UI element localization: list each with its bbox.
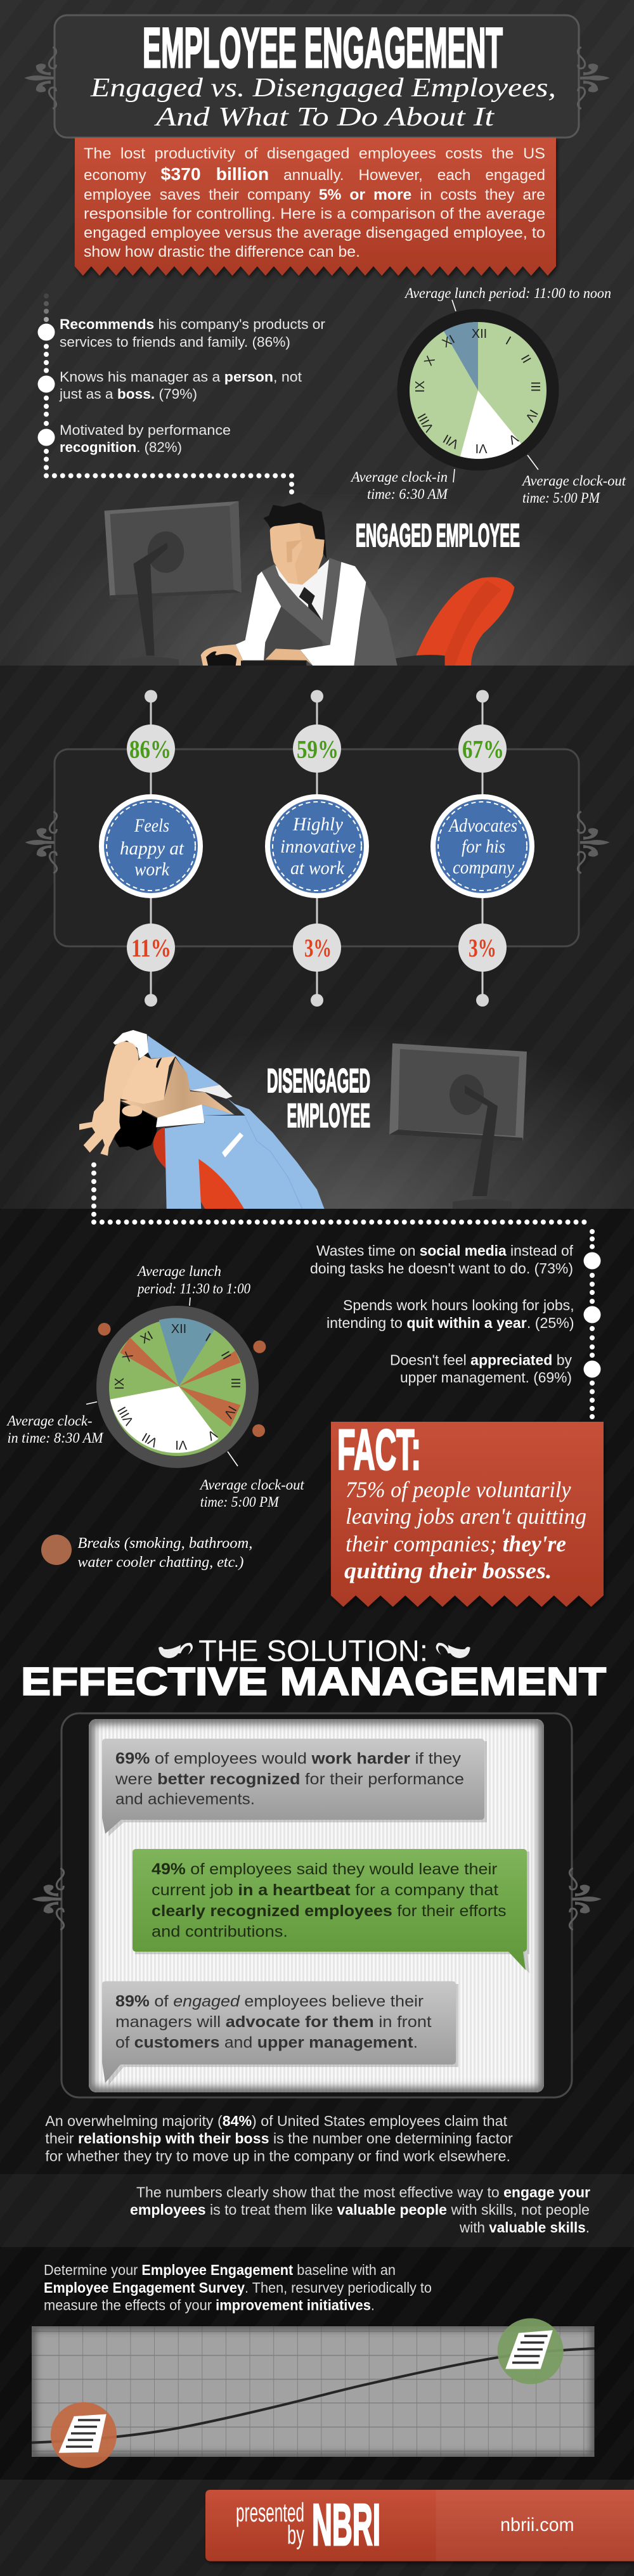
speech bubble: recognition: 69% of employees would work harder if they bbox=[115, 1750, 462, 1768]
numerals: III bbox=[528, 382, 542, 392]
light card bbox=[89, 1719, 544, 2092]
numerals: VI bbox=[175, 1438, 187, 1452]
numerals: V bbox=[205, 1427, 219, 1443]
clock face bbox=[109, 1319, 246, 1456]
numerals bbox=[113, 1322, 242, 1452]
text block: determine baseline bbox=[44, 2262, 432, 2314]
dotted connector bbox=[38, 293, 294, 494]
numerals: VII bbox=[139, 1429, 160, 1450]
panel: title header bbox=[24, 15, 610, 138]
label: clock-out: Average clock-out bbox=[521, 473, 626, 489]
by: by bbox=[287, 2520, 304, 2550]
legend text: Breaks (smoking, bathroom, bbox=[77, 1535, 252, 1552]
marker: baseline survey bbox=[51, 2402, 117, 2468]
intro text: employee saves their company 5% or more in costs they are bbox=[84, 186, 545, 203]
numerals: I bbox=[203, 1330, 213, 1344]
subtitle line 1: Engaged vs. Disengaged Employees, bbox=[90, 74, 556, 103]
text: knows manager: Knows his manager as a person, not bbox=[60, 369, 302, 385]
label: clock-out time: time: 5:00 PM bbox=[522, 490, 601, 506]
text block: overwhelming majority bbox=[45, 2113, 513, 2165]
illustration: disengaged employee bbox=[79, 1030, 527, 1209]
speech bubble: recognition: and achievements. bbox=[115, 1791, 255, 1808]
label: clock-out time: time: 5:00 PM bbox=[200, 1494, 280, 1510]
column: advocates: company bbox=[453, 857, 515, 878]
column: advocates bbox=[430, 690, 534, 1007]
numerals: X bbox=[422, 354, 438, 368]
numerals: II bbox=[218, 1349, 233, 1362]
column: innovative: at work bbox=[290, 858, 345, 879]
fact text: 75% of people voluntarily bbox=[346, 1477, 571, 1502]
numerals: XII bbox=[472, 327, 487, 341]
illustration: engaged employee at desk bbox=[105, 501, 520, 666]
speech bubble: advocate: managers will advocate for them in front bbox=[115, 2013, 432, 2031]
clock: disengaged employee bbox=[6, 1263, 304, 1510]
label: lunch period: period: 11:30 to 1:00 bbox=[136, 1280, 250, 1297]
legend text line 2: water cooler chatting, etc.) bbox=[77, 1554, 243, 1571]
column: happy at work: 86% bbox=[129, 735, 171, 763]
fact text line 2: leaving jobs aren't quitting bbox=[346, 1504, 586, 1529]
fact text line 3: their companies; they're bbox=[346, 1531, 566, 1556]
text block: determine baseline: Employee Engagement Survey. Then, resurvey periodically to bbox=[44, 2279, 432, 2296]
text: looking for jobs: Spends work hours looking for jobs, bbox=[343, 1297, 574, 1313]
monitor bbox=[105, 501, 242, 666]
intro text: responsible for controlling. Here is a comparison of the average bbox=[84, 205, 545, 222]
intro text bbox=[84, 145, 545, 261]
numerals: VII bbox=[441, 431, 462, 451]
fact heading: FACT: bbox=[337, 1419, 421, 1482]
text block: numbers clearly show: with valuable skills. bbox=[459, 2219, 590, 2236]
presented: presented bbox=[236, 2497, 304, 2527]
numerals: XI bbox=[440, 333, 457, 351]
numerals: VI bbox=[476, 441, 487, 455]
panel: engaged employee facts bbox=[38, 293, 325, 494]
outer frame bbox=[61, 1713, 572, 2097]
text: knows manager line 2: just as a boss. (79%) bbox=[59, 386, 197, 402]
icon: left ornament bbox=[32, 1868, 64, 1930]
red footer bar bbox=[205, 2490, 634, 2561]
speech bubble: advocate bbox=[102, 1981, 458, 2085]
numerals: IX bbox=[413, 381, 427, 392]
chair bbox=[390, 577, 514, 666]
chart area bbox=[32, 2326, 595, 2457]
white wedge bbox=[110, 1386, 218, 1453]
label: clock-in: Average clock-in bbox=[350, 469, 448, 485]
clock face bbox=[410, 322, 547, 459]
speech bubble: heartbeat: clearly recognized employees for their efforts bbox=[152, 1902, 506, 1920]
numerals: IV bbox=[221, 1403, 239, 1421]
intro text: engaged employee versus the average disengaged employee, to bbox=[84, 224, 545, 242]
title frame bbox=[55, 15, 579, 138]
column: innovative: 3% bbox=[304, 934, 332, 962]
numerals: IX bbox=[113, 1378, 127, 1389]
marker: resurvey bbox=[498, 2318, 564, 2384]
panel: introduction bbox=[75, 138, 556, 276]
speech bubble: heartbeat bbox=[133, 1849, 529, 1973]
text block: determine baseline: measure the effects of your improvement initiatives. bbox=[44, 2297, 375, 2314]
icon: left ornament bbox=[24, 47, 56, 109]
label: clock-in time: time: 6:30 AM bbox=[367, 486, 449, 502]
text block: overwhelming majority: their relationship with their boss is the number one determining factor bbox=[45, 2130, 513, 2147]
footer: presented by NBRI bbox=[205, 2490, 634, 2561]
numerals: I bbox=[503, 334, 513, 348]
text: appreciated: Doesn't feel appreciated by bbox=[390, 1351, 572, 1368]
clock ring bbox=[397, 309, 559, 470]
icon: right ornament bbox=[578, 47, 610, 109]
dotted connector bbox=[91, 1162, 601, 1419]
column: happy at work bbox=[99, 690, 203, 1007]
column: innovative: innovative bbox=[280, 836, 356, 857]
text: quit within a year: intending to quit within a year. (25%) bbox=[327, 1315, 574, 1331]
work-free wedge bbox=[460, 390, 521, 459]
intro text: The lost productivity of disengaged employees costs the US bbox=[84, 145, 545, 162]
icon: left ornament bbox=[25, 811, 57, 873]
legend: breaks bbox=[41, 1535, 252, 1571]
monitor bbox=[389, 1043, 527, 1209]
ticks bbox=[452, 300, 538, 482]
speech bubble: heartbeat: current job in a heartbeat for a company that bbox=[152, 1881, 498, 1899]
speech bubble: heartbeat: 49% of employees said they would leave their bbox=[152, 1860, 497, 1878]
url panel highlight bbox=[436, 2490, 634, 2561]
label: clock-in: Average clock- bbox=[6, 1413, 92, 1429]
column: advocates: 3% bbox=[469, 934, 496, 962]
numerals: III bbox=[228, 1378, 242, 1388]
column: advocates: 67% bbox=[462, 735, 504, 763]
numerals bbox=[413, 327, 542, 455]
speech bubble: advocate: 89% of engaged employees believe their bbox=[115, 1993, 424, 2011]
solution heading: THE SOLUTION: bbox=[198, 1634, 428, 1667]
label: clock-in time: in time: 8:30 AM bbox=[8, 1430, 104, 1446]
numerals: XII bbox=[171, 1322, 186, 1336]
lunch wedge bbox=[444, 322, 478, 390]
column: happy at work: work bbox=[134, 859, 170, 880]
text: motivated: Motivated by performance bbox=[60, 422, 231, 438]
url: nbrii.com bbox=[500, 2515, 574, 2535]
text block: numbers clearly show bbox=[130, 2184, 590, 2236]
swirl right bbox=[436, 1643, 470, 1658]
numerals: VIII bbox=[115, 1404, 137, 1427]
text block: numbers clearly show: employees is to treat them like valuable people with skills, not people bbox=[130, 2201, 590, 2218]
column: happy at work: 11% bbox=[131, 934, 171, 962]
text: social media: Wastes time on social media instead of bbox=[316, 1242, 574, 1259]
lunch wedge bbox=[159, 1318, 214, 1386]
text block: determine baseline: Determine your Employee Engagement baseline with an bbox=[44, 2262, 396, 2278]
label: lunch: Average lunch bbox=[136, 1263, 221, 1279]
ticks bbox=[86, 1298, 238, 1466]
illustration: disengaged employee: DISENGAGED bbox=[267, 1062, 370, 1100]
text block: overwhelming majority: An overwhelming majority (84%) of United States employees claim that bbox=[45, 2113, 508, 2129]
column: happy at work: happy at bbox=[120, 838, 184, 859]
panel: engaged vs disengaged stats bbox=[25, 690, 610, 1007]
clock ring bbox=[96, 1306, 259, 1468]
swirl left bbox=[158, 1643, 193, 1658]
break markers bbox=[98, 1323, 266, 1437]
intro text: economy $370 billion annually. However, each engaged bbox=[84, 164, 545, 184]
column: innovative: 59% bbox=[297, 735, 339, 763]
speech bubble: recognition bbox=[102, 1739, 487, 1836]
icon: right ornament bbox=[569, 1868, 602, 1930]
text: social media line 2: doing tasks he doesn't want to do. (73%) bbox=[310, 1260, 573, 1277]
text block: numbers clearly show: The numbers clearly show that the most effective way to engage your bbox=[136, 2184, 590, 2201]
effective management: EFFECTIVE MANAGEMENT bbox=[21, 1660, 606, 1704]
label: lunch: Average lunch period: 11:00 to noon bbox=[404, 285, 611, 301]
numerals: II bbox=[518, 352, 533, 366]
numerals: IV bbox=[522, 407, 540, 425]
callout: fact bbox=[331, 1419, 604, 1607]
stats frame bbox=[55, 749, 579, 946]
heading: the solution bbox=[21, 1634, 606, 1704]
footer: presented by NBRI: NBRI bbox=[312, 2492, 380, 2558]
panel: disengaged employee facts bbox=[91, 1162, 601, 1419]
red torn banner bbox=[75, 138, 556, 276]
column: advocates: for his bbox=[462, 836, 505, 857]
red torn panel bbox=[331, 1422, 604, 1607]
numerals: VIII bbox=[415, 411, 437, 434]
text: recommends line 2: services to friends and family. (86%) bbox=[60, 334, 290, 350]
speech bubble: heartbeat: and contributions. bbox=[152, 1922, 288, 1940]
numerals: X bbox=[120, 1349, 136, 1364]
column: advocates: Advocates bbox=[448, 815, 517, 836]
break wedges bbox=[120, 1337, 241, 1427]
person bbox=[201, 503, 398, 666]
text: upper management: upper management. (69%) bbox=[400, 1369, 572, 1386]
illustration: disengaged employee: EMPLOYEE bbox=[287, 1097, 370, 1135]
panel: survey statistics bbox=[32, 1713, 602, 2097]
clock: engaged employee bbox=[350, 285, 626, 506]
subtitle line 2: And What To Do About It bbox=[153, 103, 495, 132]
legend swatch bbox=[41, 1535, 72, 1565]
speech bubble: advocate: of customers and upper management . bbox=[115, 2033, 418, 2051]
numerals: XI bbox=[138, 1329, 155, 1347]
speech bubble: recognition: were better recognized for their performance bbox=[115, 1770, 464, 1788]
intro text: show how drastic the difference can be. bbox=[84, 243, 360, 261]
text: motivated line 2: recognition. (82%) bbox=[60, 439, 182, 455]
column: innovative: Highly bbox=[292, 814, 344, 835]
column: innovative bbox=[265, 690, 369, 1007]
trend line bbox=[32, 2348, 595, 2443]
label: clock-out: Average clock-out bbox=[199, 1477, 304, 1493]
column: happy at work: Feels bbox=[134, 815, 169, 836]
text block: overwhelming majority: for whether they try to move up in the company or find work elsewhere. bbox=[45, 2148, 510, 2165]
line chart: engagement improvement bbox=[32, 2318, 595, 2468]
text: recommends: Recommends his company's products or bbox=[60, 316, 325, 332]
person bbox=[79, 1030, 325, 1209]
numerals: V bbox=[506, 430, 521, 447]
icon: right ornament bbox=[578, 811, 610, 873]
fact text line 4: quitting their bosses. bbox=[344, 1558, 552, 1583]
